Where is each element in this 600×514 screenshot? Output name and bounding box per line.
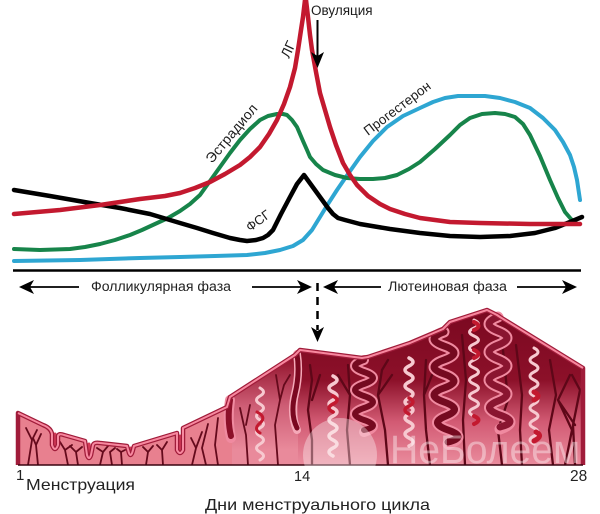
label: follicular phase: Фолликулярная фаза [91, 279, 232, 294]
base line [18, 464, 583, 466]
coiled arteries [256, 388, 264, 460]
tissue base [18, 310, 583, 465]
label: Менструация: Менструация [26, 477, 135, 494]
vessels: left [26, 375, 290, 465]
surface outline [18, 310, 583, 465]
arrow: luteal phase left [323, 280, 381, 294]
panel: endometrium cross-section [18, 305, 588, 465]
axis title: Дни менструального цикла [205, 497, 430, 514]
small glands [55, 434, 180, 456]
label: luteal phase: Лютеиновая фаза [388, 279, 508, 294]
arrow: ovulation [311, 20, 324, 68]
wavy glands [55, 317, 540, 460]
gland: fissure at 445 [434, 332, 458, 444]
watermark [303, 418, 580, 492]
gland: fissure at 365 [355, 360, 373, 432]
arrow: ovulation dashed [311, 283, 324, 342]
axis label: day 28: 28 [570, 468, 587, 485]
watermark text: НеБолеем [390, 428, 580, 472]
curve: LH [14, 0, 580, 224]
arrow: luteal phase right [517, 280, 577, 294]
axis label: day 1: 1 [16, 467, 24, 484]
arrow: follicular phase left [19, 280, 79, 294]
gland: fissure at 497 [489, 317, 510, 429]
label: Прогестерон: Прогестерон [361, 78, 434, 138]
curve: estradiol [14, 113, 576, 250]
axis label: day 14: 14 [294, 469, 310, 485]
gland: day 14 pocket [229, 400, 231, 438]
hormone curves chart [14, 0, 582, 261]
tissue shading [26, 305, 588, 465]
arrow: follicular phase right [252, 280, 312, 294]
label: ЛГ: ЛГ [277, 38, 299, 60]
gland: centre fissure [293, 354, 298, 430]
curve: FSH [14, 175, 582, 241]
vessels: right [308, 325, 580, 465]
label: ФСГ: ФСГ [243, 207, 273, 234]
watermark logo circle [303, 418, 377, 492]
label: Эстрадиол: Эстрадиол [202, 100, 261, 166]
curve: progesterone [14, 96, 580, 261]
label: Овуляция: Овуляция [311, 3, 373, 18]
